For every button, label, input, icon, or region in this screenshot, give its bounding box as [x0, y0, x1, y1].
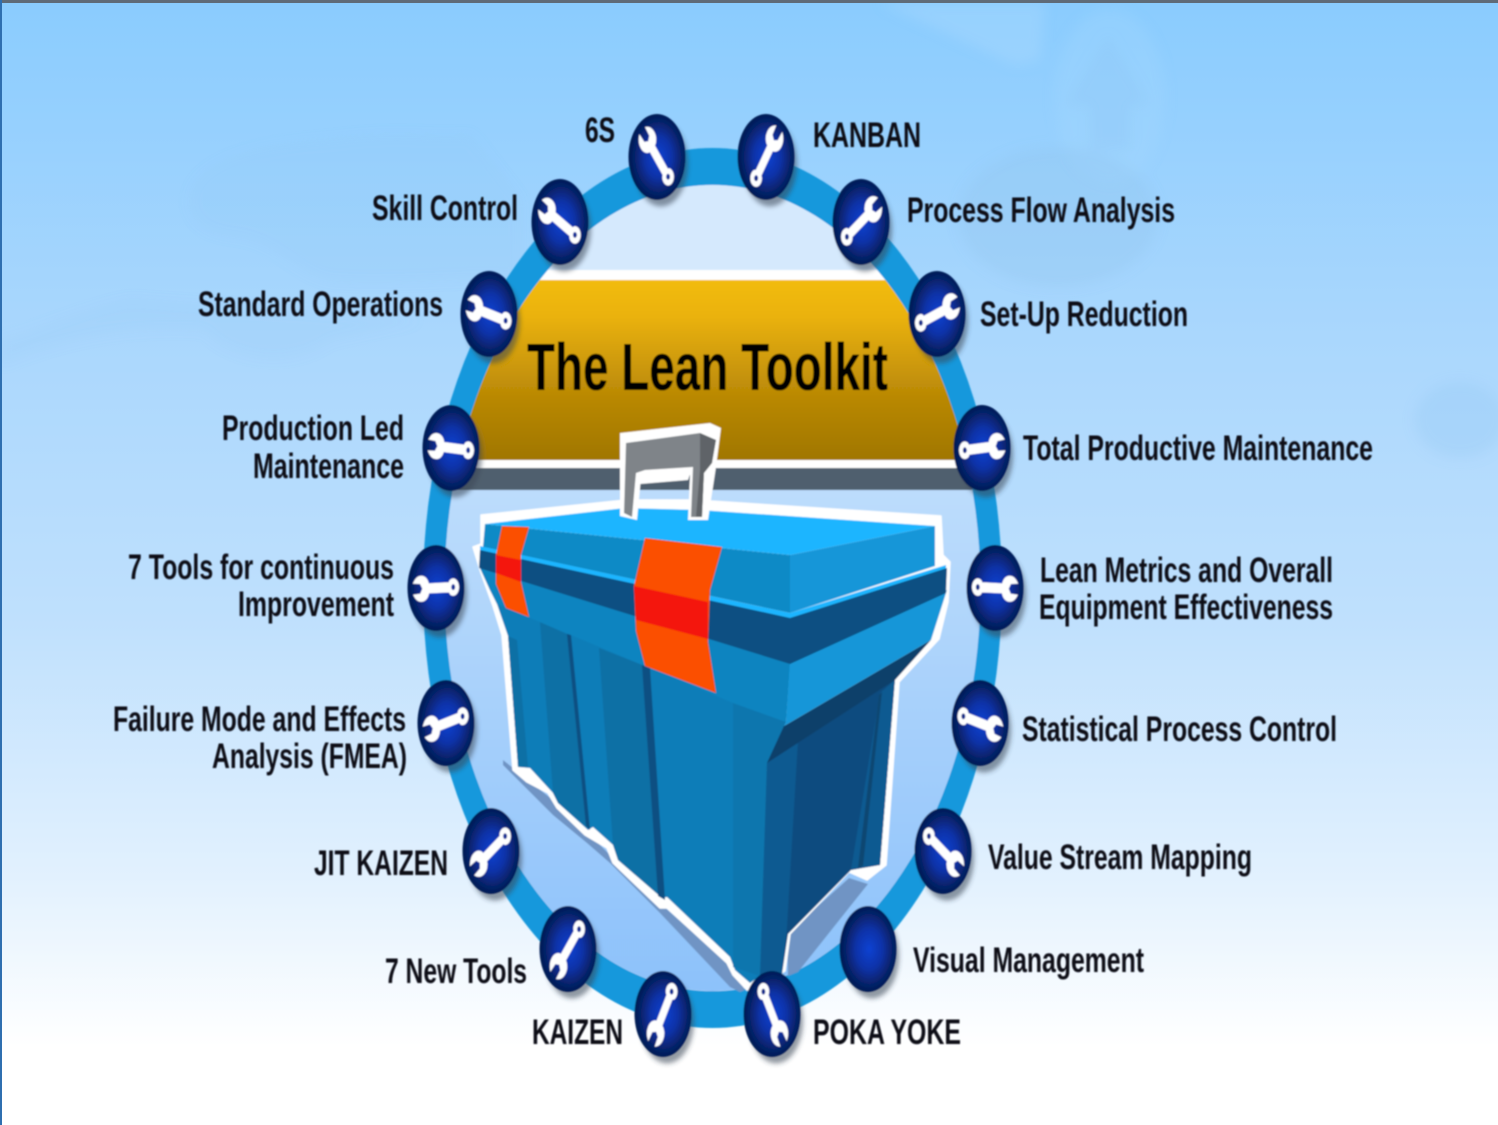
label: 7 Tools for continuous Improvement: Improvement [238, 585, 394, 624]
lid [483, 524, 790, 613]
icon: Statistical Process Control wrench [952, 680, 1011, 772]
label: Failure Mode and Effects Analysis (FMEA) [113, 700, 407, 776]
icon: Total Productive Maintenance wrench [954, 405, 1013, 498]
icon: Value Stream Mapping wrench [914, 808, 974, 900]
label: Set-Up Reduction: Set-Up Reduction [980, 295, 1188, 334]
icon: 7 New Tools wrench [540, 906, 599, 998]
icon: Skill Control wrench [532, 179, 591, 272]
right body [760, 679, 895, 976]
label: 7 Tools for continuous Improvement: 7 Tools for continuous [128, 548, 394, 587]
label: Lean Metrics and Overall Equipment Effectiveness: Lean Metrics and Overall [1040, 551, 1333, 590]
label: KAIZEN: KAIZEN [532, 1013, 623, 1052]
icon: Process Flow Analysis wrench [832, 179, 892, 272]
title: The Lean Toolkit [527, 330, 888, 405]
icon: Lean Metrics wrench [966, 545, 1026, 638]
icon: JIT KAIZEN wrench [462, 808, 522, 900]
toolbox white outline [473, 500, 950, 990]
icon: FMEA wrench [418, 680, 477, 772]
left body [480, 568, 790, 983]
label: 7 New Tools: 7 New Tools [385, 952, 527, 991]
tool icons [408, 114, 1026, 1064]
icon: Set-Up Reduction wrench [908, 271, 968, 364]
icon: 6S wrench [628, 114, 688, 206]
label: 7 Tools for continuous Improvement [128, 548, 394, 624]
label: Skill Control: Skill Control [372, 189, 518, 228]
label: JIT KAIZEN: JIT KAIZEN [314, 844, 448, 883]
icon: 7 Tools wrench [408, 545, 467, 638]
label: Lean Metrics and Overall Equipment Effectiveness [1039, 551, 1333, 627]
ring [423, 148, 1002, 1028]
label: Process Flow Analysis: Process Flow Analysis [907, 191, 1175, 230]
label: Value Stream Mapping: Value Stream Mapping [988, 838, 1252, 877]
label: Standard Operations: Standard Operations [198, 285, 443, 324]
label: KANBAN: KANBAN [813, 116, 921, 155]
flange [480, 568, 790, 722]
labels [113, 111, 1373, 1052]
icon: Production Led Maintenance wrench [422, 405, 482, 498]
label: Visual Management: Visual Management [913, 941, 1144, 980]
label: Statistical Process Control: Statistical Process Control [1022, 710, 1337, 749]
toolbox shadows [503, 760, 745, 992]
icon: POKA YOKE wrench [744, 971, 803, 1064]
ring interior [420, 180, 1010, 995]
label: Production Led Maintenance [222, 409, 404, 486]
label: Lean Metrics and Overall Equipment Effectiveness: Equipment Effectiveness [1039, 588, 1333, 627]
large strap [634, 538, 722, 693]
icon: KANBAN wrench [738, 114, 797, 206]
small strap [496, 526, 529, 617]
label: 6S: 6S [585, 111, 615, 150]
label: Production Led Maintenance: Production Led [222, 409, 404, 448]
toolbox [473, 423, 950, 992]
label: POKA YOKE: POKA YOKE [813, 1013, 961, 1052]
label: Production Led Maintenance: Maintenance [253, 447, 404, 486]
gold title band [468, 279, 959, 461]
icon: KAIZEN wrench [634, 971, 694, 1064]
icon: Visual Management blank disc [840, 906, 899, 998]
label: Failure Mode and Effects Analysis (FMEA): Failure Mode and Effects [113, 700, 406, 739]
label: Failure Mode and Effects Analysis (FMEA): Analysis (FMEA) [212, 737, 407, 776]
handle [620, 423, 721, 520]
icon: Standard Operations wrench [460, 271, 520, 364]
